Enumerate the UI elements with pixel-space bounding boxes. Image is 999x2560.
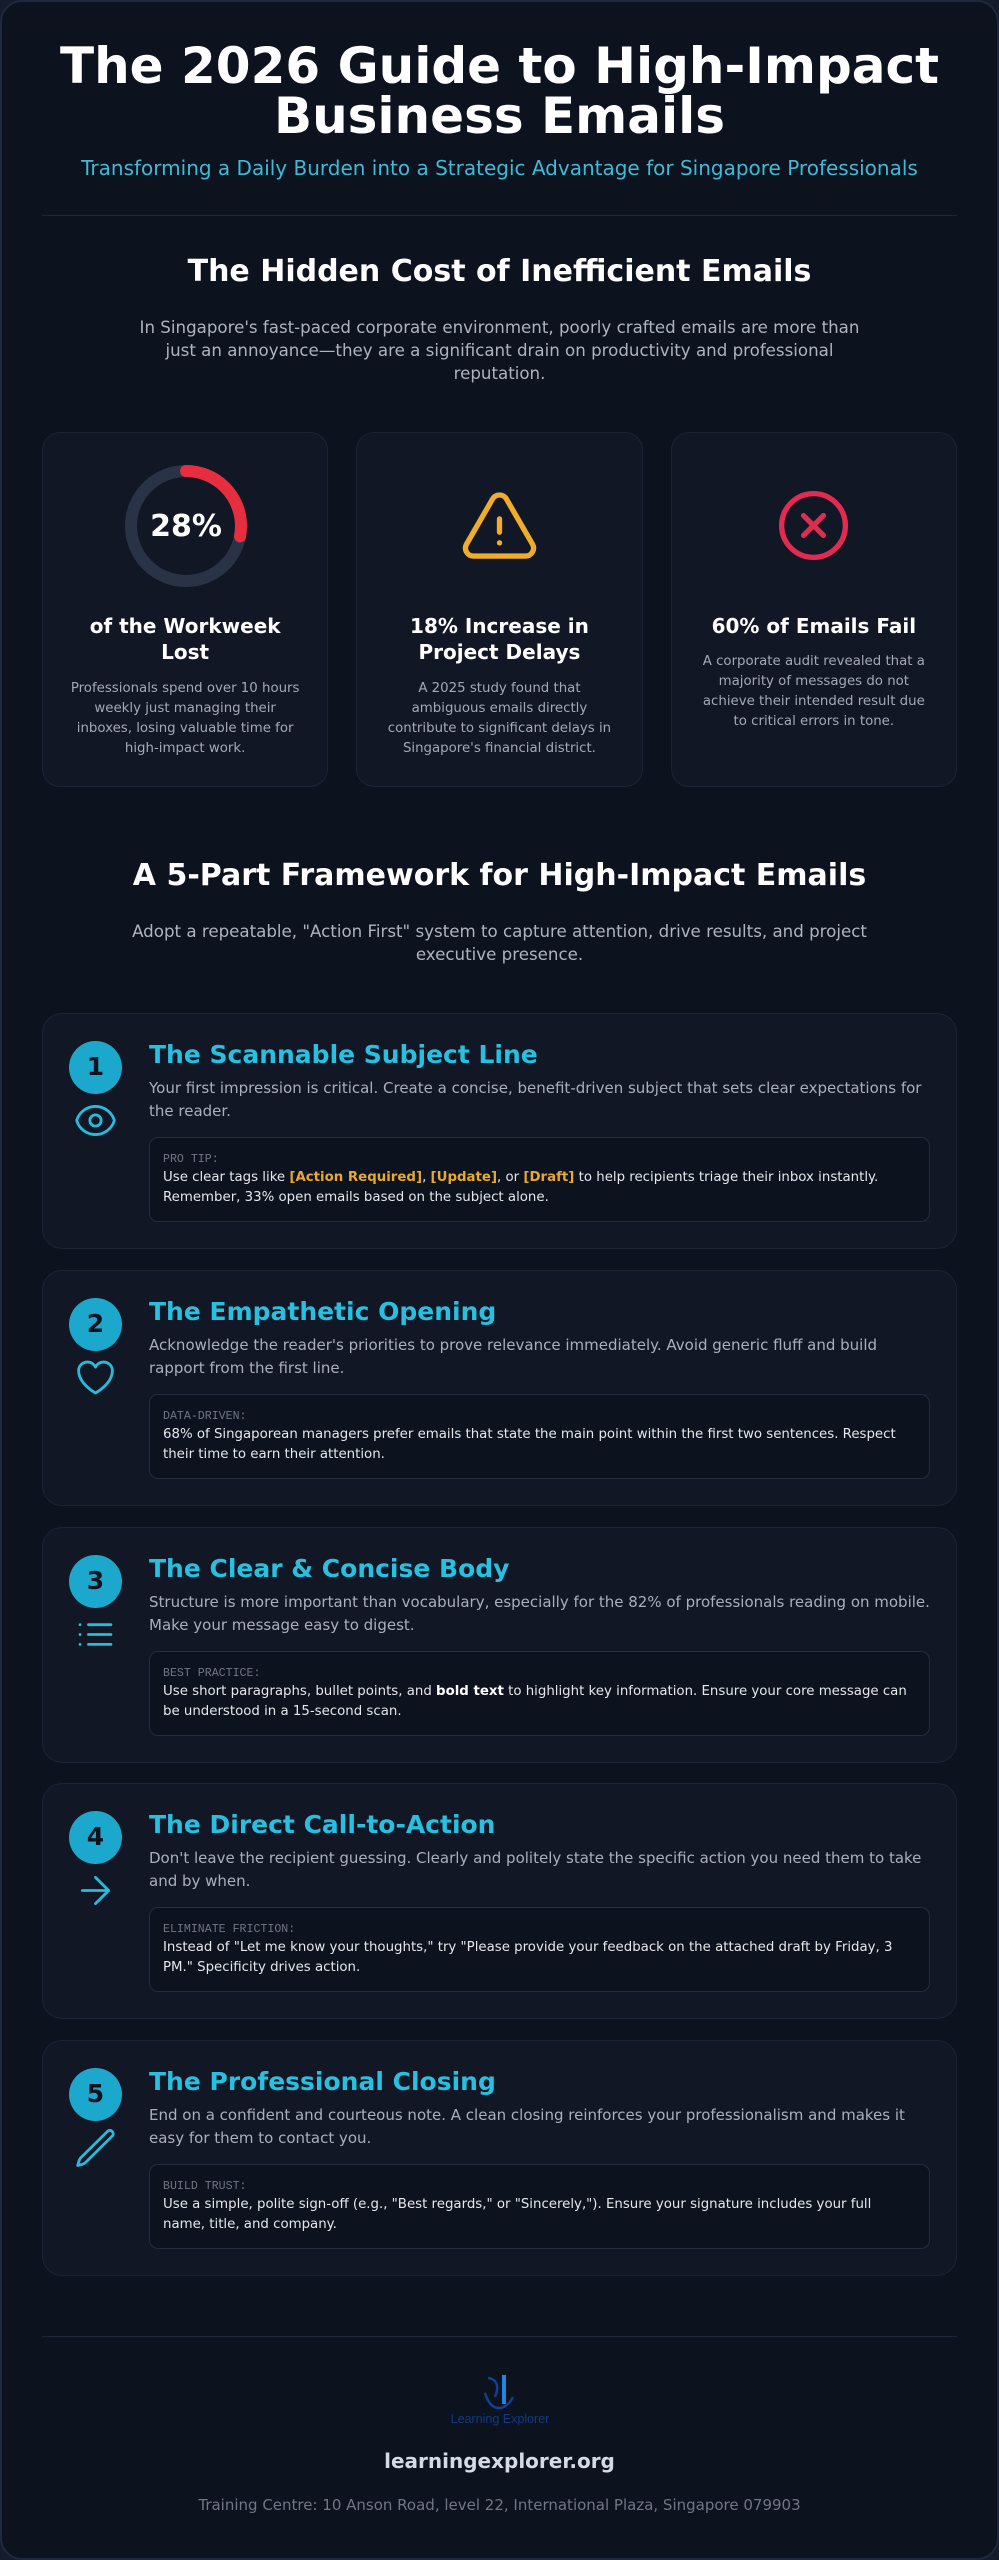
text: framework intro: Adopt a repeatable, "Action First" system to capture attention, drive results, and project — [132, 922, 867, 941]
number badge — [69, 1811, 122, 1864]
step title: The Clear & Concise Body — [149, 1554, 509, 1582]
callout text: Remember, 33% open emails based on the subject alone. — [163, 1190, 549, 1205]
step text — [149, 1336, 877, 1377]
callout label: DATA-DRIVEN: — [163, 1410, 246, 1423]
stat heading: 60% of Emails Fail — [712, 614, 916, 638]
stat heading: Lost — [161, 640, 209, 664]
callout label: BEST PRACTICE: — [163, 1666, 260, 1680]
panel: step 2 — [42, 1270, 957, 1506]
logo: Learning Explorer: Learning Explorer — [451, 2412, 549, 2426]
callout text — [163, 1170, 878, 1205]
callout: build trust — [149, 2164, 930, 2248]
heading: hidden cost: The Hidden Cost of Inefficient Emails — [188, 254, 811, 289]
callout label: PRO TIP: — [163, 1153, 219, 1166]
icon: heart — [77, 1360, 114, 1394]
step text: Your first impression is critical. Create a concise, benefit-driven subject that sets clear expectations for — [149, 1079, 921, 1097]
panel: step 1 — [42, 1013, 957, 1249]
text: framework intro — [132, 922, 867, 964]
icon: list — [78, 1623, 112, 1646]
title — [60, 37, 939, 145]
title: The 2026 Guide to High-Impact — [60, 37, 939, 95]
number badge — [69, 1298, 122, 1351]
stat description — [388, 681, 611, 756]
stat description: A 2025 study found that — [418, 681, 581, 696]
text: hidden cost intro: In Singapore's fast-paced corporate environment, poorly crafted emails are more than — [140, 318, 859, 337]
number badge: 3 — [87, 1566, 104, 1594]
text: hidden cost intro: reputation. — [454, 364, 545, 383]
stat description: to critical errors in tone. — [734, 714, 894, 729]
step text: rapport from the first line. — [149, 1359, 344, 1377]
step title: The Empathetic Opening — [149, 1297, 496, 1326]
callout: data-driven — [149, 1394, 930, 1479]
panel: project delays — [356, 432, 643, 787]
stat description: weekly just managing their — [94, 701, 276, 716]
step title: The Direct Call-to-Action — [149, 1810, 495, 1839]
step text: Don't leave the recipient guessing. Clearly and politely state the specific action you need them to take — [149, 1849, 921, 1867]
number badge: 5 — [87, 2078, 104, 2108]
step title: The Professional Closing — [149, 2066, 496, 2096]
donut chart: 28%: 28% — [150, 509, 222, 544]
footer address: Training Centre: 10 Anson Road, level 22, International Plaza, Singapore 079903 — [198, 2496, 801, 2514]
callout text: be understood in a 15-second scan. — [163, 1704, 402, 1719]
text: hidden cost intro: just an annoyance—they are a significant drain on productivity and professional — [165, 341, 834, 360]
stat description: ambiguous emails directly — [412, 701, 587, 716]
text: framework intro: executive presence. — [416, 945, 583, 964]
heading: framework: A 5-Part Framework for High-Impact Emails — [133, 858, 866, 893]
subtitle: Transforming a Daily Burden into a Strategic Advantage for Singapore Professionals — [81, 156, 918, 180]
number badge — [69, 1554, 122, 1608]
stat heading: Project Delays — [418, 640, 580, 664]
number badge: 2 — [87, 1309, 104, 1338]
icon: warning triangle — [462, 492, 536, 559]
stat description: inboxes, losing valuable time for — [77, 721, 294, 736]
stat description: achieve their intended result due — [703, 694, 925, 709]
icon: eye — [75, 1105, 116, 1136]
stat heading — [410, 614, 589, 664]
callout text: their time to earn their attention. — [163, 1447, 385, 1462]
number badge — [69, 1041, 122, 1094]
callout text — [163, 2197, 871, 2232]
icon: pencil — [76, 2129, 115, 2167]
text: hidden cost intro — [140, 318, 859, 383]
callout: eliminate friction — [149, 1907, 930, 1992]
callout: pro tip — [149, 1137, 930, 1222]
stat heading: of the Workweek — [90, 614, 281, 638]
panel: step 5 — [42, 2040, 957, 2276]
step text: the reader. — [149, 1102, 231, 1120]
step text: easy for them to contact you. — [149, 2128, 371, 2146]
callout text: 68% of Singaporean managers prefer emails that state the main point within the first two sentences. Respect — [163, 1427, 896, 1442]
step text — [149, 1849, 921, 1890]
callout text — [163, 1684, 907, 1719]
step title: The Scannable Subject Line — [149, 1040, 538, 1069]
stat description — [702, 654, 925, 729]
callout: best practice — [149, 1650, 930, 1736]
callout text: PM." Specificity drives action. — [163, 1960, 360, 1975]
stat description: contribute to significant delays in — [388, 721, 611, 736]
logo: Learning Explorer — [451, 2375, 550, 2426]
stat description: majority of messages do not — [719, 674, 909, 689]
step text: Make your message easy to digest. — [149, 1616, 415, 1634]
icon: x circle — [779, 491, 848, 560]
callout text: Use clear tags like [Action Required], [Update], or [Draft] to help recipients triage their inbox instantly. — [163, 1170, 878, 1185]
callout text — [163, 1427, 896, 1462]
callout text — [163, 1940, 892, 1975]
callout label: BUILD TRUST: — [163, 2180, 246, 2192]
title: Business Emails — [274, 87, 725, 145]
icon: arrow — [81, 1876, 110, 1906]
stat description: Singapore's financial district. — [403, 741, 596, 756]
callout text: Use short paragraphs, bullet points, and bold text to highlight key information. Ensure your core message can — [163, 1684, 907, 1699]
callout text: Use a simple, polite sign-off (e.g., "Best regards," or "Sincerely,"). Ensure your signature includes your full — [163, 2197, 871, 2212]
number badge: 4 — [87, 1822, 104, 1851]
panel: step 3 — [42, 1526, 957, 1762]
number badge — [69, 2068, 122, 2120]
footer site name: learningexplorer.org — [384, 2449, 615, 2473]
step text — [149, 2106, 905, 2146]
panel: 28% of workweek lost — [42, 432, 328, 787]
callout label: ELIMINATE FRICTION: — [163, 1923, 295, 1936]
stat description — [71, 681, 299, 756]
donut chart: 28% — [125, 465, 247, 587]
step text — [149, 1079, 922, 1120]
number badge: 1 — [87, 1052, 104, 1081]
panel: emails fail — [671, 432, 957, 787]
step text: Acknowledge the reader's priorities to prove relevance immediately. Avoid generic fluff and build — [149, 1336, 877, 1354]
step text: End on a confident and courteous note. A clean closing reinforces your professionalism and makes it — [149, 2106, 905, 2124]
step text: and by when. — [149, 1872, 250, 1890]
step text — [149, 1592, 930, 1634]
callout text: name, title, and company. — [163, 2217, 337, 2232]
stat heading: 18% Increase in — [410, 614, 589, 638]
stat description: A corporate audit revealed that a — [703, 654, 925, 669]
callout text: Instead of "Let me know your thoughts," try "Please provide your feedback on the attached draft by Friday, 3 — [163, 1940, 892, 1955]
stat description: Professionals spend over 10 hours — [71, 681, 299, 696]
stat description: high-impact work. — [125, 741, 245, 756]
panel: step 4 — [42, 1783, 957, 2019]
step text: Structure is more important than vocabulary, especially for the 82% of professionals reading on mobile. — [149, 1592, 930, 1610]
stat heading — [90, 614, 281, 664]
